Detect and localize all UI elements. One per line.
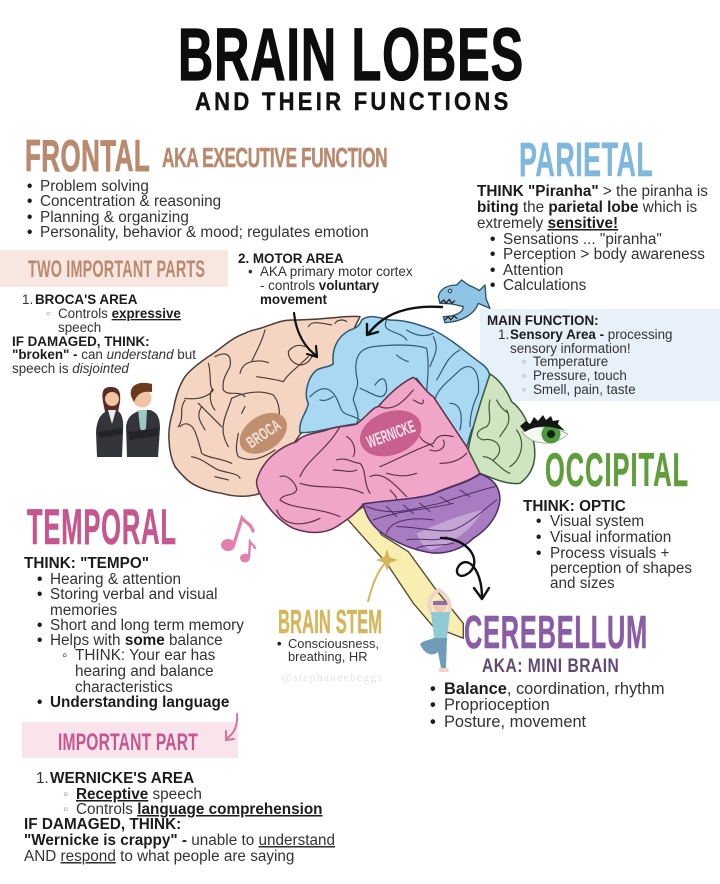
occipital text: perception of shapes (550, 560, 692, 577)
text: Broca's area: "broken" - can understand but (12, 347, 196, 362)
arrow: brain stem (368, 552, 395, 602)
wernicke badge: WERNICKE (364, 416, 418, 452)
occipital text (523, 498, 692, 592)
panel: parietal (477, 134, 708, 294)
frontal bullet list: Planning & organizing (40, 209, 189, 226)
panel: occipital (523, 445, 692, 592)
temporal text (24, 555, 244, 711)
icon: yoga figure (420, 590, 450, 672)
frontal bullet list: • (27, 193, 32, 210)
temporal text: • (37, 694, 42, 711)
frontal lobe (169, 316, 360, 496)
parietal text: • (490, 231, 495, 248)
text: Broca's area: speech (58, 320, 101, 335)
heading band: important part (22, 722, 238, 758)
temporal text: • (37, 571, 42, 588)
panel: main function: ◦ (522, 368, 527, 383)
text: Broca's area: BROCA'S AREA (35, 292, 138, 307)
icon: music notes (221, 518, 255, 562)
temporal text: • (37, 617, 42, 634)
parietal text: • (490, 246, 495, 263)
brain stem text: Consciousness, (288, 636, 379, 651)
arrow: cerebellum (441, 538, 489, 599)
heading: parietal: PARIETAL (519, 134, 653, 187)
cerebellum list: Proprioception (444, 696, 550, 714)
text: Wernicke's area: "Wernicke is crappy" - unable to understand (24, 832, 335, 849)
title: BRAIN LOBES (178, 14, 523, 97)
temporal lobe (257, 377, 480, 532)
temporal text: Understanding language (50, 694, 229, 711)
cerebellum list (430, 680, 664, 731)
broca badge: BROCA (243, 415, 284, 452)
temporal text: Short and long term memory (50, 617, 244, 634)
text: Wernicke's area: ◦ (63, 786, 68, 803)
occipital text: and sizes (550, 575, 615, 592)
parietal text: • (490, 277, 495, 294)
cerebellum list: • (430, 713, 436, 731)
icon: businesspeople (96, 383, 160, 457)
text: Wernicke's area: AND respond to what people are saying (24, 848, 294, 865)
heading band: two important parts: TWO IMPORTANT PARTS (28, 256, 205, 283)
cerebellum list: • (430, 680, 436, 698)
occipital text: • (536, 513, 541, 530)
brain stem text: • (277, 636, 282, 651)
subtitle: AND THEIR FUNCTIONS (195, 88, 508, 115)
text: Broca's area: Controls expressive (58, 306, 181, 321)
panel: temporal (24, 500, 244, 711)
temporal text: hearing and balance (75, 663, 214, 680)
parietal text: Attention (503, 262, 563, 279)
parietal text: Perception > body awareness (503, 246, 705, 263)
temporal text: ◦ (62, 647, 67, 664)
frontal bullet list: Problem solving (40, 178, 149, 195)
panel: motor area (238, 251, 413, 307)
occipital text: Visual system (550, 513, 644, 530)
temporal text: characteristics (75, 679, 173, 696)
cerebellum list: • (430, 696, 436, 714)
text: Broca's area: 1. (22, 292, 33, 307)
icon: eye (520, 415, 568, 444)
text: Wernicke's area: IF DAMAGED, THINK: (24, 816, 181, 833)
parietal text: extremely sensitive! (477, 215, 618, 232)
occipital text: • (536, 529, 541, 546)
occipital text: • (536, 545, 541, 562)
temporal text: Helps with some balance (50, 632, 223, 649)
panel: motor area: movement (260, 292, 328, 307)
panel: main function: Pressure, touch (533, 368, 627, 383)
heading: executive function: AKA EXECUTIVE FUNCTION (162, 142, 388, 173)
panel: motor area: - controls voluntary (260, 278, 380, 293)
panel: cerebellum (430, 606, 664, 731)
temporal text: Storing verbal and visual (50, 586, 218, 603)
text: Broca's area: speech is disjointed (12, 361, 129, 376)
text: Wernicke's area: 1. (36, 770, 49, 787)
text: Wernicke's area: Controls language comprehension (76, 801, 323, 818)
occipital text: Process visuals + (550, 545, 670, 562)
panel: main function: ◦ (522, 354, 527, 369)
parietal text: biting the parietal lobe which is (477, 199, 698, 216)
text: Wernicke's area (24, 770, 335, 865)
parietal lobe (300, 317, 490, 447)
cerebellum (363, 474, 500, 553)
text: Wernicke's area: WERNICKE'S AREA (50, 770, 194, 787)
panel: main function (480, 309, 720, 401)
illustration: brain (169, 316, 535, 638)
brain stem text: breathing, HR (288, 649, 368, 664)
heading: temporal: TEMPORAL (27, 500, 176, 555)
occipital text: THINK: OPTIC (523, 498, 626, 515)
panel: main function: Sensory Area - processing (510, 327, 673, 342)
panel: frontal (25, 131, 388, 241)
arrow: temporal to important part (226, 714, 237, 740)
panel: important part (22, 714, 335, 865)
frontal bullet list: Concentration & reasoning (40, 193, 221, 210)
frontal bullet list: • (27, 224, 32, 241)
parietal text: • (490, 262, 495, 279)
panel: motor area: • (248, 264, 253, 279)
panel: motor area: AKA primary motor cortex (260, 264, 413, 279)
parietal text: Calculations (503, 277, 587, 294)
occipital lobe (468, 374, 535, 484)
panel: main function: Temperature (533, 354, 608, 369)
heading band: important part: IMPORTANT PART (58, 730, 198, 756)
brain stem (347, 507, 463, 638)
frontal bullet list: Personality, behavior & mood; regulates emotion (40, 224, 369, 241)
frontal bullet list: • (27, 178, 32, 195)
temporal text: memories (50, 602, 117, 619)
temporal text: THINK: Your ear has (75, 647, 216, 664)
panel: motor area: 2. MOTOR AREA (238, 251, 344, 266)
temporal text: THINK: "TEMPO" (24, 555, 149, 572)
parietal text (477, 183, 708, 294)
heading: brain stem: BRAIN STEM (278, 603, 382, 641)
panel: main function: Smell, pain, taste (533, 382, 636, 397)
woman (96, 387, 123, 457)
text: Wernicke's area: Receptive speech (76, 786, 202, 803)
occipital text: Visual information (550, 529, 671, 546)
parietal text: Sensations ... "piranha" (503, 231, 662, 248)
frontal bullet list (27, 178, 369, 241)
cerebellum list: Balance, coordination, rhythm (444, 680, 664, 698)
panel: two important parts (0, 250, 228, 376)
frontal bullet list: • (27, 209, 32, 226)
text: Broca's area: IF DAMAGED, THINK: (12, 334, 150, 349)
heading: cerebellum: CEREBELLUM (464, 606, 647, 658)
temporal text: • (37, 632, 42, 649)
panel: main function: MAIN FUNCTION: (487, 313, 599, 328)
temporal text: Hearing & attention (50, 571, 181, 588)
brain stem text (277, 636, 379, 664)
text: Wernicke's area: ◦ (63, 801, 68, 818)
parietal text: THINK "Piranha" > the piranha is (477, 183, 708, 200)
heading: occipital: OCCIPITAL (545, 445, 688, 497)
temporal text: • (37, 586, 42, 603)
wernicke badge (353, 402, 428, 465)
panel: main function: ◦ (522, 382, 527, 397)
man (126, 383, 160, 457)
panel: main function: 1. (498, 327, 509, 342)
heading band: two important parts (0, 250, 228, 287)
text: Broca's area: ◦ (46, 306, 51, 321)
watermark: @stephaneebeggs (281, 670, 382, 684)
arrow: fish to parietal lobe (367, 307, 442, 335)
panel: main function: sensory information! (510, 341, 631, 356)
subheading: mini brain: AKA: MINI BRAIN (482, 654, 619, 676)
broca badge (232, 404, 295, 462)
icon: piranha (438, 280, 490, 323)
panel: brain stem (277, 603, 382, 684)
text: Broca's area (12, 292, 196, 376)
arrow: motor area (294, 313, 317, 357)
cerebellum list: Posture, movement (444, 713, 587, 731)
heading: frontal: FRONTAL (25, 131, 150, 181)
